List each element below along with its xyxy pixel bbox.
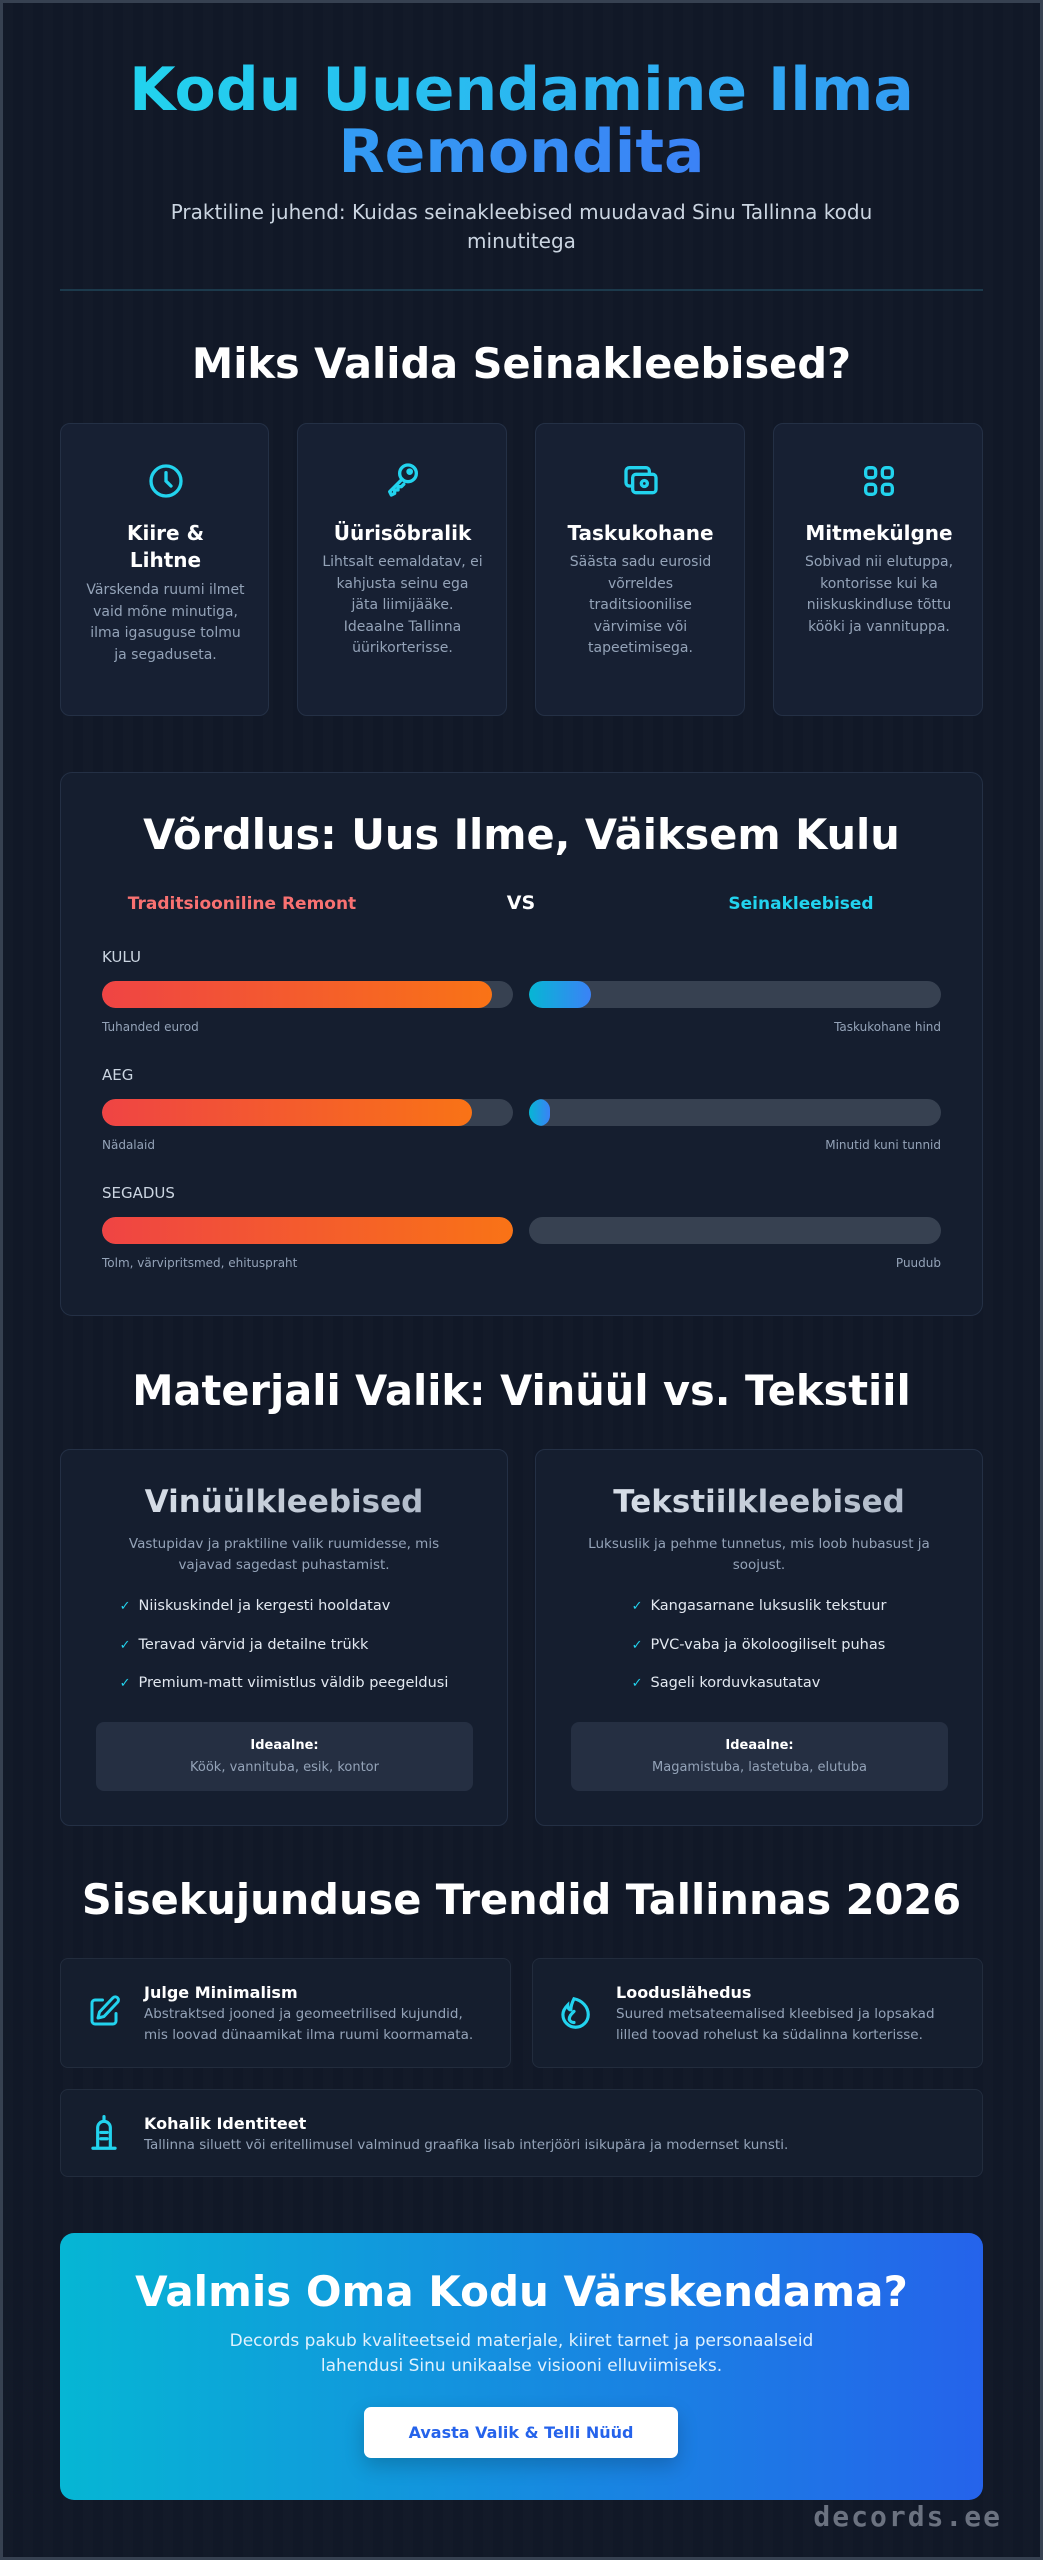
list: textile features: ✓ Sageli korduvkasutatav (632, 1675, 820, 1691)
bar chart: AEG: Nädalaid (102, 1138, 155, 1152)
icon: leaf drop (561, 1997, 590, 2029)
list: vinyl features: ✓ Niiskuskindel ja kergesti hooldatav (120, 1598, 390, 1614)
trend: Looduslähedus (532, 1958, 983, 2068)
callout: CTA: Decords pakub kvaliteetseid materjale, kiiret tarnet ja personaalseid lahendusi Sinu unikaalse visiooni elluviimiseks. (230, 2331, 813, 2376)
heading: Trendid: Sisekujunduse Trendid Tallinnas 2026 (82, 1875, 961, 1924)
list: vinyl features: ✓ Teravad värvid ja detailne trükk (120, 1636, 368, 1652)
ideal box: Ideaalne: (250, 1738, 319, 1753)
card: Taskukohane (535, 423, 745, 716)
legend labels: VS (507, 892, 535, 914)
bar chart: KULU: Taskukohane hind (834, 1020, 941, 1034)
panel: vinyl: Vastupidav ja praktiline valik ruumidesse, mis vajavad sagedast puhastamist. (129, 1536, 439, 1573)
list: textile features: ✓ PVC-vaba ja ökoloogiliselt puhas (632, 1636, 885, 1652)
trend: Kohalik Identiteet (60, 2089, 983, 2177)
trend: Kohalik Identiteet: Kohalik Identiteet (144, 2114, 306, 2133)
bar chart: AEG: Minutid kuni tunnid (825, 1138, 941, 1152)
card: Taskukohane: Taskukohane (567, 521, 714, 545)
panel: comparison (60, 772, 983, 1316)
heading: Miks Valida: Miks Valida Seinakleebised? (192, 339, 851, 388)
trend: Julge Minimalism: Julge Minimalism (144, 1983, 298, 2002)
trend: Looduslähedus: Suured metsateemalised kleebised ja lopsakad (616, 2006, 935, 2022)
icon: clock (149, 464, 183, 498)
title (129, 55, 914, 187)
ideal box (571, 1722, 948, 1791)
panel: benefits cards (60, 423, 983, 716)
panel: textile: Tekstiilkleebised (613, 1484, 905, 1520)
button (364, 2407, 678, 2458)
trend: Kohalik Identiteet: Tallinna siluett või eritellimusel valminud graafika lisab interjööri isikupära ja modernset kunsti. (144, 2137, 788, 2153)
trend: Julge Minimalism: mis loovad dünaamikat ilma ruumi koormamata. (144, 2027, 473, 2043)
panel: vinyl (60, 1449, 508, 1826)
ideal box (96, 1722, 473, 1791)
heading: Materjali Valik: Materjali Valik: Vinüül vs. Tekstiil (132, 1366, 911, 1415)
trend: Looduslähedus: lilled toovad rohelust ka südalinna korterisse. (616, 2027, 923, 2043)
list: textile features: ✓ Kangasarnane luksuslik tekstuur (632, 1598, 886, 1614)
list: textile features (632, 1598, 886, 1691)
title: Kodu Uuendamine Ilma (129, 55, 914, 125)
trend: Julge Minimalism (60, 1958, 511, 2068)
icon: pencil (90, 1995, 120, 2026)
icon: money (624, 466, 658, 494)
card: Üürisõbralik: Üürisõbralik (334, 521, 471, 545)
heading: Võrdlus: Võrdlus: Uus Ilme, Väiksem Kulu (143, 810, 900, 859)
title: Remondita (338, 117, 705, 187)
card: Mitmekülgne: Sobivad nii elutuppa, kontorisse kui ka niiskuskindluse tõttu kööki ja vannituppa. (805, 554, 953, 634)
card: Mitmekülgne: Mitmekülgne (805, 521, 953, 545)
card: Kiire & Lihtne: Kiire & (127, 521, 204, 545)
bar chart: KULU: Tuhanded eurod (102, 1020, 199, 1034)
button: Avasta Valik & Telli Nüüd (409, 2423, 633, 2442)
panel: vinyl: Vinüülkleebised (145, 1484, 423, 1520)
list: vinyl features: ✓ Premium-matt viimistlus väldib peegeldusi (120, 1675, 448, 1691)
bar chart: SEGADUS: SEGADUS (102, 1184, 175, 1202)
icon: tower (91, 2115, 117, 2150)
ideal box: Köök, vannituba, esik, kontor (190, 1760, 379, 1775)
bar chart: AEG: AEG (102, 1066, 133, 1084)
panel: textile (535, 1449, 983, 1826)
bar chart: KULU: KULU (102, 948, 141, 966)
trend: Looduslähedus: Looduslähedus (616, 1983, 751, 2002)
logo text: decords.ee (813, 2500, 1002, 2533)
ideal box: Magamistuba, lastetuba, elutuba (652, 1760, 867, 1775)
card: Üürisõbralik: Lihtsalt eemaldatav, ei kahjusta seinu ega jäta liimijääke. Ideaalne Tallinna üürikorterisse. (322, 554, 483, 656)
card: Mitmekülgne (773, 423, 983, 716)
bar chart: AEG (102, 1066, 941, 1152)
card: Kiire & Lihtne: Lihtne (130, 548, 201, 572)
bar chart: SEGADUS: Tolm, värvipritsmed, ehituspraht (102, 1256, 297, 1270)
card: Taskukohane: Säästa sadu eurosid võrreldes traditsioonilise värvimise või tapeetimisega. (570, 554, 711, 656)
callout: CTA (60, 2233, 983, 2500)
legend labels: Traditsiooniline Remont (128, 894, 356, 914)
card: Kiire & Lihtne: Värskenda ruumi ilmet vaid mõne minutiga, ilma igasuguse tolmu ja segaduseta. (86, 582, 245, 662)
legend labels: Seinakleebised (728, 894, 874, 914)
icon: key (388, 463, 418, 497)
subtitle: Praktiline juhend: Kuidas seinakleebised muudavad Sinu Tallinna kodu minutitega (171, 200, 872, 253)
bar chart: SEGADUS: Puudub (896, 1256, 941, 1270)
bar chart: KULU (102, 948, 941, 1034)
panel: textile: Luksuslik ja pehme tunnetus, mis loob hubasust ja soojust. (588, 1536, 930, 1573)
card: Kiire & Lihtne (60, 423, 269, 716)
card: Üürisõbralik (297, 423, 507, 716)
trend: Julge Minimalism: Abstraktsed jooned ja geomeetrilised kujundid, (144, 2006, 463, 2022)
ideal box: Ideaalne: (725, 1738, 794, 1753)
legend labels (128, 892, 874, 914)
callout: CTA: Valmis Oma Kodu Värskendama? (135, 2267, 908, 2316)
list: vinyl features (120, 1598, 448, 1691)
bar chart: SEGADUS (102, 1184, 941, 1270)
icon: grid (864, 466, 894, 496)
